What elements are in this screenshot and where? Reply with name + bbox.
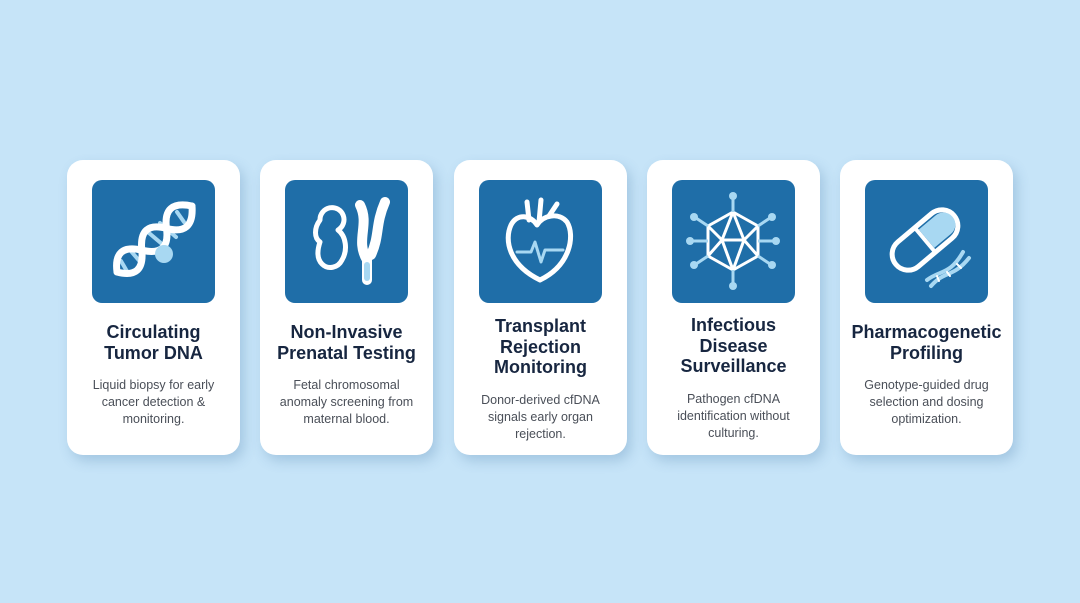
title bbox=[851, 322, 1002, 426]
description: Liquid biopsy for early cancer detection & monitoring. bbox=[93, 378, 214, 426]
title bbox=[677, 315, 790, 440]
title: Transplant bbox=[495, 316, 586, 336]
title bbox=[277, 322, 416, 426]
title: Monitoring bbox=[494, 357, 587, 377]
icon: heart with pulse bbox=[479, 180, 602, 303]
description: Genotype-guided drug selection and dosing optimization. bbox=[864, 378, 989, 426]
title: Tumor DNA bbox=[104, 342, 203, 362]
card: pharmacogenetic bbox=[840, 160, 1013, 455]
title: Rejection bbox=[500, 336, 581, 356]
card: circulating tumor DNA bbox=[67, 160, 240, 455]
title: Surveillance bbox=[680, 356, 787, 376]
card: NIPT bbox=[260, 160, 433, 455]
card: infectious disease bbox=[647, 160, 820, 455]
title: Non-Invasive bbox=[290, 322, 403, 342]
icon: fetus and chromosome bbox=[285, 180, 408, 303]
card: transplant bbox=[454, 160, 627, 455]
title: Prenatal Testing bbox=[277, 342, 416, 362]
description: Donor-derived cfDNA signals early organ rejection. bbox=[481, 392, 600, 440]
title bbox=[93, 322, 214, 426]
title: Circulating bbox=[106, 322, 200, 342]
title: Infectious bbox=[691, 315, 776, 335]
title: Disease bbox=[699, 336, 768, 356]
title: Pharmacogenetic bbox=[851, 322, 1002, 342]
icon: DNA helix bbox=[92, 180, 215, 303]
description: Fetal chromosomal anomaly screening from maternal blood. bbox=[280, 378, 413, 426]
description: Pathogen cfDNA identification without culturing. bbox=[677, 392, 790, 440]
title bbox=[481, 316, 600, 440]
title: Profiling bbox=[890, 342, 963, 362]
icon: virus bbox=[672, 180, 795, 303]
icon: capsule with DNA bbox=[865, 180, 988, 303]
